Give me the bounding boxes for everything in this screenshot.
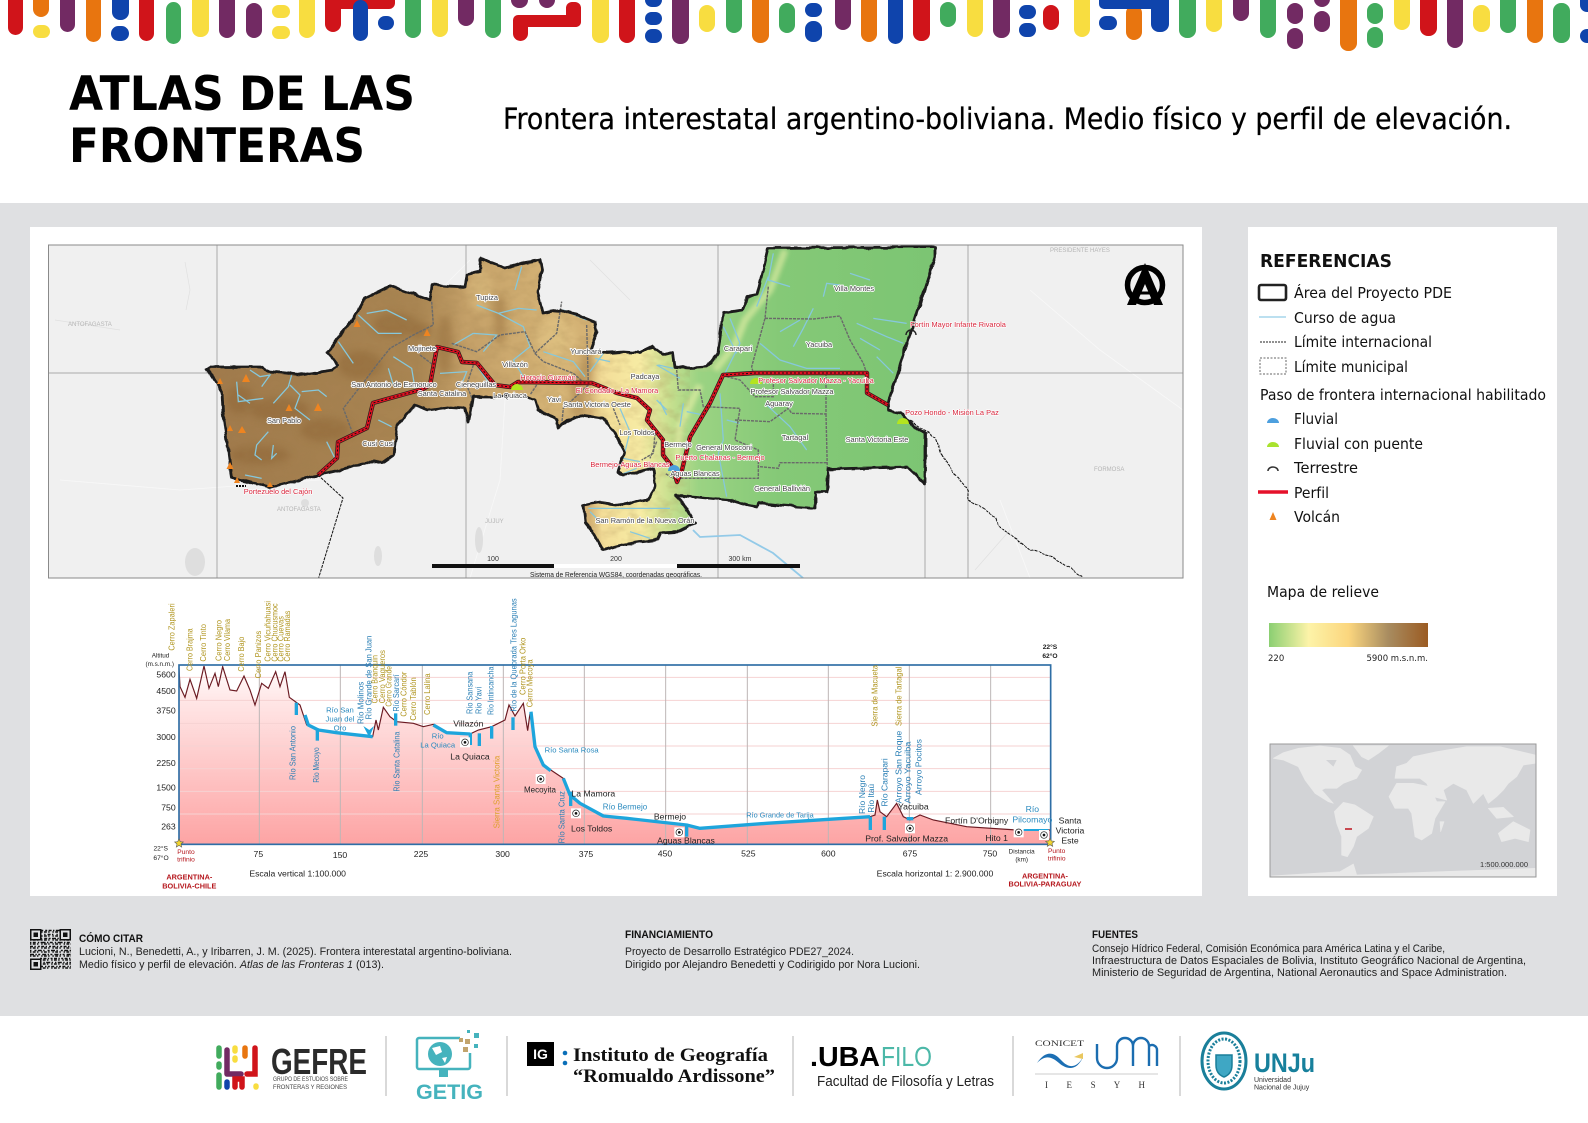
trifinio labels: BOLIVIA-PARAGUAY	[1009, 880, 1082, 889]
subtitle: Frontera interestatal argentino-boliviana. Medio físico y perfil de elevación.	[503, 102, 1512, 136]
y axis labels: 4500	[156, 686, 176, 696]
locality labels: Santa	[1059, 816, 1081, 826]
relief legend title: Mapa de relieve	[1267, 583, 1379, 601]
border crossing labels: El Condado - La Mamora	[576, 386, 659, 395]
profile line on map	[318, 347, 888, 482]
trifinio labels: trifinio	[177, 857, 195, 864]
logo: GEFRE	[219, 1041, 367, 1091]
locality labels: Bermejo	[654, 811, 686, 821]
border crossing labels	[244, 320, 1007, 496]
river labels: Río Santa Rosa	[545, 746, 599, 755]
scale bar: 300 km	[729, 556, 752, 563]
place labels: Profesor Salvador Mazza	[751, 387, 834, 396]
logo: UBA Filo: Facultad de Filosofía y Letras	[817, 1073, 994, 1090]
x axis labels: 22°S	[1043, 643, 1058, 651]
y axis labels: 3750	[156, 706, 176, 716]
legend labels: Fluvial	[1294, 410, 1338, 428]
map background	[49, 245, 1183, 578]
river labels: Río	[1026, 804, 1039, 814]
logo: UNJu: UNJu	[1254, 1048, 1315, 1078]
citation: Lucioni, N., Benedetti, A., y Iribarren, J. M. (2025). Frontera interestatal argentino-boliviana.	[79, 946, 512, 958]
legend symbols	[1258, 285, 1288, 520]
scale notes: Escala horizontal 1: 2.900.000	[877, 869, 993, 879]
river labels: Río Mecoyo	[311, 747, 321, 783]
trifinio labels: ARGENTINA-	[166, 873, 213, 882]
title: FRONTERAS	[69, 119, 365, 174]
place labels: Tartagal	[782, 433, 809, 442]
map frame	[48, 245, 1183, 578]
place labels: Los Toldos	[619, 428, 655, 437]
trifinio labels: ARGENTINA-	[1022, 871, 1069, 880]
logo: UNJu: Nacional de Jujuy	[1254, 1084, 1310, 1092]
river labels: Río Sarcarí	[391, 674, 401, 712]
municipal boundaries	[343, 287, 867, 478]
x axis labels: 150	[333, 850, 347, 860]
border crossing labels: Horacio Guzmán	[520, 373, 576, 382]
place labels: Mojinete	[408, 344, 436, 353]
legend labels: Fluvial con puente	[1294, 435, 1423, 453]
citation: Medio físico y perfil de elevación. Atlas de las Fronteras 1 (013).	[79, 959, 384, 971]
peak labels: Cerro Porta Orko	[518, 637, 528, 695]
peak labels: Cerro Zapaleri	[166, 603, 176, 651]
locality labels: Aguas Blancas	[657, 835, 716, 845]
place labels: San Pablo	[267, 416, 301, 425]
relief colour ramp	[1269, 623, 1428, 647]
peak labels: Cerro Tinto	[198, 624, 208, 662]
trifinio labels: Punto	[1048, 848, 1066, 855]
scale notes	[249, 869, 994, 879]
peak labels: Cerro Mecoya	[525, 659, 535, 707]
header background	[0, 0, 1588, 203]
elevation profile chart	[146, 598, 1085, 890]
river labels: Río San	[326, 706, 354, 715]
y axis labels: (m.s.n.m.)	[146, 661, 174, 668]
logo: Instituto de Geografía: “Romualdo Ardissone”	[573, 1067, 775, 1087]
river labels: Río Carapari	[879, 758, 889, 807]
place labels: Villazón	[502, 360, 528, 369]
peak labels: Cerro Tablón	[408, 677, 418, 721]
logo: GETIG: GETIG	[416, 1081, 483, 1104]
locality labels	[450, 719, 1085, 846]
international boundary	[318, 420, 1083, 580]
peak labels: Cerro Branquín	[369, 655, 379, 703]
background region labels	[34, 248, 1124, 525]
sources: FUENTES	[1092, 929, 1138, 941]
sources	[1092, 929, 1526, 979]
sources: Infraestructura de Datos Espaciales de Bolivia, Instituto Geográfico Nacional de Argentina,	[1092, 955, 1526, 967]
locality labels: La Mamora	[571, 788, 615, 798]
locality labels: Mecoyita	[524, 786, 557, 795]
grid lines	[49, 245, 1183, 578]
x axis labels: 300	[495, 849, 510, 859]
place labels: San Ramón de la Nueva Orán	[595, 516, 695, 525]
place labels: Cieneguillas	[456, 380, 496, 389]
place labels: San Antonio de Esmoruco	[351, 380, 437, 389]
trifinio stars	[175, 838, 1054, 847]
logo: GEFRE: GRUPO DE ESTUDIOS SOBRE	[273, 1077, 348, 1083]
legend labels: Volcán	[1294, 508, 1340, 526]
background region labels: FORMOSA	[1094, 467, 1124, 473]
peak labels: Sierra de Tartagal	[894, 667, 904, 726]
legend labels: Paso de frontera internacional habilitado	[1260, 386, 1546, 404]
locality labels: Victoria	[1056, 826, 1085, 836]
logo: GETIG	[416, 1030, 483, 1104]
river labels: Río Grande de Tarija	[746, 811, 815, 820]
locator world map	[1270, 744, 1536, 877]
background region labels: PRESIDENTE HAYES	[1050, 248, 1110, 254]
legend labels	[1260, 283, 1546, 526]
map	[34, 240, 1183, 580]
panel: legend	[1248, 227, 1557, 896]
river labels: Río Grande de San Juan	[364, 636, 374, 719]
scale bar	[432, 556, 800, 568]
scale bar: 100	[487, 556, 499, 563]
y axis labels: 1500	[156, 783, 176, 793]
y axis labels: 263	[161, 822, 176, 832]
logo: UBA Filo: FILO	[881, 1041, 932, 1072]
legend labels: Área del Proyecto PDE	[1294, 283, 1452, 302]
locality labels: Fortín D'Orbigny	[945, 815, 1009, 825]
peak labels: Sierra Santa Victoria	[491, 755, 501, 828]
y axis labels: 5600	[156, 669, 176, 679]
peak labels: Cerro Negro	[214, 620, 224, 661]
peak labels: Cerro Lalina	[422, 673, 432, 715]
border crossing markers	[236, 330, 916, 486]
x axis labels: 225	[414, 849, 428, 859]
grey body background	[0, 203, 1588, 1016]
x axis labels: 675	[903, 848, 917, 858]
border crossing labels: Puerto Chalanas - Bermejo	[675, 453, 765, 462]
place labels: La Quiaca	[493, 391, 528, 400]
place labels: Villa Montes	[834, 284, 874, 293]
place labels: Yunchará	[570, 347, 603, 356]
relief ramp labels: 220	[1268, 654, 1284, 664]
peak labels: Cerro Cuevas	[275, 616, 285, 662]
rivers west	[237, 267, 680, 538]
place labels: General Ballivián	[754, 484, 810, 493]
legend labels: Límite internacional	[1294, 333, 1432, 351]
logo: GEFRE: GEFRE	[271, 1041, 367, 1082]
place labels: Bermejo	[664, 440, 692, 449]
background region labels: ANTOFAGASTA	[277, 507, 321, 513]
place labels: Padcaya	[631, 372, 660, 381]
trifinio labels	[162, 848, 1082, 890]
x axis labels: 450	[658, 848, 672, 858]
peak labels: Cerro Panizos	[253, 631, 263, 678]
river labels: Río Negro	[857, 775, 867, 814]
top colour stripe band	[8, 0, 1588, 51]
river labels: Río Santa Cruz	[556, 791, 566, 843]
x axis labels: 600	[821, 848, 836, 858]
logo: Instituto de Geografía: IG	[533, 1046, 548, 1062]
river labels: Río Yaví	[474, 686, 484, 714]
peak labels	[166, 601, 904, 828]
panel: map and profile	[30, 227, 1202, 896]
faint background lines and salt flats	[60, 260, 1183, 578]
peak labels: Cerro Chucusmoc	[269, 603, 279, 662]
place labels: Yavi	[547, 395, 561, 404]
river labels: Pilcomayo	[1012, 815, 1052, 825]
project area outline	[207, 247, 935, 550]
x axis labels: (km)	[1015, 856, 1028, 863]
peak labels: Cerro Vagueros	[377, 650, 387, 703]
volcano markers	[217, 320, 430, 487]
funding: FINANCIAMIENTO	[625, 929, 713, 941]
locator world map: 1:500.000.000	[1480, 860, 1528, 869]
logo: Instituto de Geografía: Instituto de Geografía	[573, 1046, 768, 1066]
y axis labels: 22°S	[153, 845, 169, 853]
peak labels: Cerro Vilama	[222, 619, 232, 661]
locality labels: Este	[1061, 836, 1079, 846]
title	[69, 67, 415, 174]
river labels: Arroyo San Roque	[894, 730, 904, 803]
reference system note: Sistema de Referencia WGS84, coordenadas geográficas.	[530, 570, 702, 579]
legend labels: Límite municipal	[1294, 358, 1408, 376]
y axis labels	[146, 653, 176, 862]
peak labels: Cerro Ramadas	[282, 611, 292, 662]
river outside project area	[693, 530, 803, 578]
legend labels: Terrestre	[1293, 459, 1358, 477]
border crossing labels: Fortín Mayor Infante Rivarola	[910, 320, 1007, 329]
x axis labels: 62°O	[1042, 652, 1058, 660]
place labels: General Mosconi	[696, 443, 752, 452]
river tick bars	[295, 703, 886, 837]
river labels: Río San Antonio	[287, 726, 297, 780]
river labels: Río Sansana	[464, 672, 474, 714]
trifinio labels: trifinio	[1048, 856, 1066, 863]
place labels: Aguaray	[765, 399, 793, 408]
river labels: Río Bermejo	[603, 802, 648, 811]
peak labels: Cerro Brajma	[185, 628, 195, 671]
locality labels: La Quiaca	[450, 751, 490, 761]
river labels: Juan del	[326, 715, 355, 724]
locality markers	[460, 737, 1049, 840]
scale notes: Escala vertical 1:100.000	[249, 869, 346, 879]
legend heading: REFERENCIAS	[1260, 251, 1392, 272]
border crossing labels: Bermejo-Aguas Blancas	[590, 460, 670, 469]
peak labels: Cerro Vicuñahuasi	[263, 601, 273, 662]
funding: Dirigido por Alejandro Benedetti y Codirigido por Nora Lucioni.	[625, 959, 920, 971]
x axis labels: Distancia	[1009, 848, 1035, 855]
x axis labels: 525	[741, 848, 756, 858]
locality labels: Los Toldos	[571, 823, 613, 833]
y axis labels: 3000	[156, 732, 176, 742]
funding: Proyecto de Desarrollo Estratégico PDE27_2024.	[625, 946, 854, 958]
place labels: Tupiza	[476, 293, 499, 302]
x axis labels	[254, 643, 1058, 863]
river labels: Río	[432, 732, 444, 741]
place labels: Santa Catalina	[418, 389, 467, 398]
legend labels: Curso de agua	[1294, 309, 1396, 327]
river labels: Arroyo Yacuiba	[903, 741, 913, 803]
river labels: Río de la Quebrada Tres Lagunas	[509, 598, 519, 712]
x axis labels: 750	[983, 848, 997, 858]
grid lines	[179, 665, 1051, 844]
place labels: Santa Victoria Este	[846, 435, 908, 444]
scale bar: 200	[610, 556, 622, 563]
peak labels: Cerro Cóndor	[399, 671, 409, 717]
rivers east	[657, 253, 907, 497]
logo: UBA Filo: .UBA	[810, 1041, 880, 1072]
north arrow	[1127, 263, 1163, 305]
logo: UNJu: Universidad	[1254, 1077, 1291, 1084]
locality labels: Prof. Salvador Mazza	[865, 834, 948, 844]
place labels: Yacuiba	[806, 340, 833, 349]
peak labels: Cerro Bajo	[236, 636, 246, 672]
locality labels: Hito 1	[985, 833, 1008, 843]
citation	[79, 932, 512, 971]
legend labels: Perfil	[1294, 484, 1329, 502]
logo: UBA Filo	[810, 1041, 994, 1090]
logo: GEFRE: FRONTERAS Y REGIONES	[273, 1085, 347, 1091]
QR code	[30, 929, 71, 970]
sources: Ministerio de Seguridad de Argentina, National Aeronautics and Space Administration.	[1092, 967, 1507, 979]
sources: Consejo Hídrico Federal, Comisión Económica para América Latina y el Caribe,	[1092, 943, 1445, 955]
logo: CONICET UNIHR IESYH: I E S Y H	[1045, 1080, 1146, 1090]
legend	[1258, 251, 1546, 877]
title: ATLAS DE LAS	[69, 67, 415, 122]
citation: CÓMO CITAR	[79, 932, 143, 945]
background region labels: ANTOFAGASTA	[68, 322, 112, 328]
place labels: Aguas Blancas	[670, 469, 720, 478]
river labels: Río Santa Catalina	[391, 732, 401, 792]
y axis labels: 67°O	[153, 854, 169, 862]
profile line	[179, 666, 1051, 830]
river labels: Oro	[334, 723, 346, 732]
background region labels: JUJUY	[485, 519, 504, 525]
logo dividers	[386, 1036, 1180, 1096]
logo: CONICET UNIHR IESYH: CONICET	[1035, 1039, 1084, 1048]
border crossing labels: Profesor Salvador Mazza - Yacuiba	[758, 376, 875, 385]
logo: CONICET UNIHR IESYH	[1035, 1038, 1158, 1090]
y axis labels: 750	[161, 802, 176, 812]
peak labels: Sierra de Macueta	[869, 665, 879, 727]
river segments on profile	[305, 712, 1048, 830]
river labels	[287, 598, 1052, 843]
relief ramp labels: 5900 m.s.n.m.	[1366, 654, 1428, 664]
peak labels: Cerro Grande	[384, 666, 394, 707]
chart frame	[179, 665, 1051, 844]
river labels: Río Intincancha	[485, 667, 495, 715]
relief ramp labels	[1268, 654, 1428, 664]
project area with relief	[200, 240, 940, 560]
y axis labels: Altitud	[152, 653, 170, 660]
x axis labels: 375	[579, 849, 593, 859]
river labels: La Quiaca	[420, 741, 456, 750]
place labels: Cusi Cusi	[362, 439, 394, 448]
locality labels: Villazón	[453, 719, 484, 729]
river labels: Arroyo Pocitos	[914, 738, 924, 795]
place labels: Santa Victoria Oeste	[563, 400, 631, 409]
background region labels: 22°S	[34, 362, 42, 378]
trifinio labels: BOLIVIA-CHILE	[162, 881, 217, 890]
logo: Instituto de Geografía	[527, 1042, 775, 1087]
place labels: Carapari	[724, 344, 753, 353]
x axis labels: 75	[254, 849, 263, 859]
border crossing labels: Pozo Hondo - Misión La Paz	[905, 408, 999, 417]
locality labels: Yacuiba	[898, 801, 929, 811]
profile area fill	[179, 666, 1051, 844]
y axis labels: 2250	[156, 758, 176, 768]
place labels	[267, 284, 908, 525]
river labels: Río Molinos	[355, 681, 365, 724]
river labels: Río Itaú	[866, 784, 876, 813]
logo: UNJu	[1202, 1033, 1315, 1092]
border crossing labels: Portezuelo del Cajón	[244, 487, 312, 496]
funding	[625, 929, 920, 971]
trifinio labels: Punto	[177, 849, 195, 856]
